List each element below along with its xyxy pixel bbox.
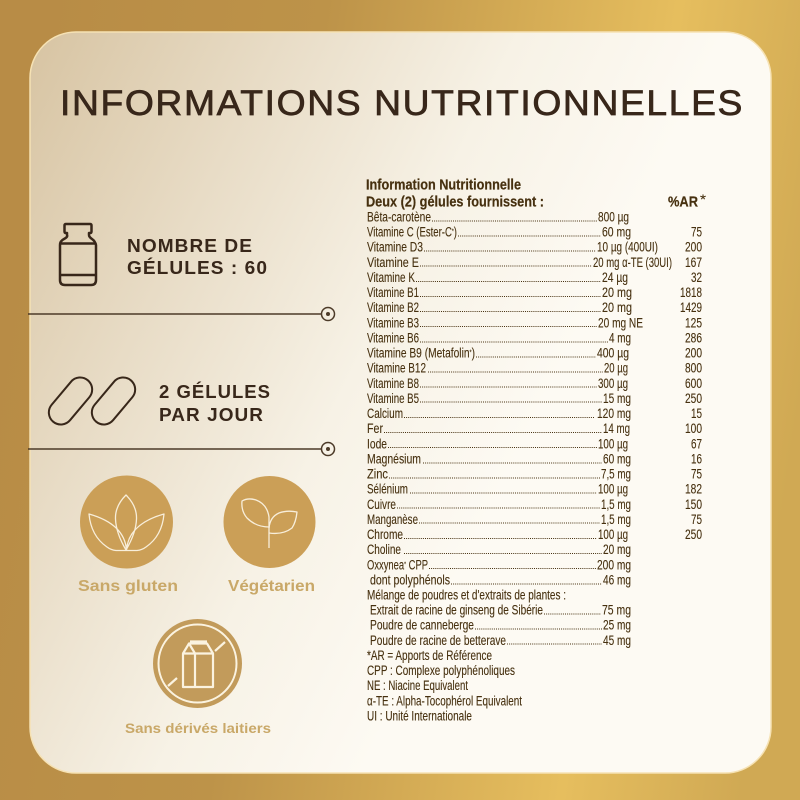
row: oxxynea: 200 mg [597,557,631,572]
row: vitamine E: Vitamine E [367,255,419,270]
row: vitamine C: 75 [691,225,702,240]
text: nombre de gélules: NOMBRE DE [127,236,253,256]
icon: crossed-out milk carton [153,619,242,708]
row: magnésium [367,451,702,466]
icon: gluten-free leaves [80,476,173,568]
row: oxxynea: * [404,561,406,568]
badge: sans gluten [78,476,178,595]
row: vitamine B2: 20 mg [602,300,632,315]
row: oxxynea: Oxxynea [367,557,420,572]
row: vitamine C: Vitamine C (Ester-C [367,225,487,240]
badge: végétarien [224,476,316,595]
row: betterave [370,633,631,648]
label: Végétarien [228,578,315,595]
row: vitamine B1: Vitamine B1 [367,285,419,300]
row: zinc [367,466,702,482]
row: vitamine B6: Vitamine B6 [367,330,419,346]
row: vitamine B9: * [470,350,472,357]
row: vitamine B9: Vitamine B9 (Metafolin [367,346,503,361]
row: fer [367,421,702,436]
row: vitamine C: * [452,229,454,236]
row: canneberge: 25 mg [603,618,631,633]
row: sélénium: 182 [685,482,702,497]
table heading [366,176,707,210]
row: dont polyphénols: 46 mg [603,572,631,587]
row: ginseng: Extrait de racine de ginseng de Sibérie [370,603,543,618]
row: vitamine B6 [367,330,702,346]
row: choline: Choline [367,542,401,557]
row: cuivre: Cuivre [367,497,396,512]
row: vitamine B2: Vitamine B2 [367,300,419,315]
row: chrome: 100 µg [598,527,628,542]
row: vitamine B1: 20 mg [602,285,632,300]
row: vitamine B8: 300 µg [598,376,628,391]
row: iode [367,436,702,451]
icon: sprout [224,476,316,568]
row: cuivre: 150 [685,497,702,512]
row: vitamine B3: 125 [685,315,702,330]
row: magnésium: Magnésium [367,451,421,466]
row: vitamine K: 24 µg [602,270,628,285]
row: vitamine E: 167 [685,255,702,270]
row: vitamine C: ) [454,225,457,240]
row: vitamine B2: 1429 [680,300,702,315]
panel: capsule count [60,224,268,285]
row: vitamine D3: 200 [685,240,702,255]
row: vitamine K: 32 [691,270,702,285]
row: calcium: 120 mg [597,406,631,421]
row: iode: 100 µg [598,436,628,451]
row: vitamine B6: 4 mg [609,330,631,346]
row: fer: 14 mg [603,421,630,436]
row: calcium: 15 [691,406,702,421]
footnotes: NE : Niacine Equivalent [367,678,468,693]
row: oxxynea [367,557,631,572]
row: vitamine B8: 600 [685,376,702,391]
row: vitamine B9: ) [472,346,475,361]
table heading: * [700,192,707,207]
row: iode: 67 [691,436,702,451]
row: mélange heading: Mélange de poudres et d'extraits de plantes : [367,588,566,602]
row: vitamine B5: 15 mg [603,391,631,406]
text: deux gélules par jour: PAR JOUR [159,405,264,425]
label: Sans gluten [78,578,178,595]
row: vitamine B3 [367,315,702,330]
row: zinc: Zinc [367,466,388,482]
row: ginseng: 75 mg [602,603,631,618]
row: calcium: Calcium [367,406,403,421]
label: Sans dérivés laitiers [125,720,271,736]
row: manganèse [367,512,702,527]
row: sélénium: Sélénium [367,482,408,497]
row: dont polyphénols: dont polyphénols [370,572,450,587]
row: vitamine B5 [367,391,702,406]
row: vitamine B1 [367,285,702,300]
row: vitamine C: 60 mg [602,225,631,240]
row: vitamine B8: Vitamine B8 [367,376,419,391]
row: sélénium [367,482,702,497]
row: magnésium: 16 [691,451,702,466]
row: manganèse: 75 [691,512,702,527]
row: oxxynea: CPP [406,557,428,572]
nutrition table [366,176,707,724]
row: cuivre [367,497,702,512]
row: vitamine B9: 400 µg [597,346,629,361]
row: vitamine B12: Vitamine B12 [367,361,426,376]
badge: sans dérivés laitiers [125,619,271,736]
row: vitamine B3: Vitamine B3 [367,315,419,330]
row: choline: 20 mg [603,542,631,557]
row: vitamine B9: 200 [685,346,702,361]
icon: two capsules [44,373,140,429]
row: vitamine B2 [367,300,702,315]
divider with end marker [28,308,334,320]
footnotes: UI : Unité Internationale [367,708,472,724]
text: nombre de gélules: GÉLULES : 60 [127,257,268,278]
text: deux gélules par jour: 2 GÉLULES [159,381,271,402]
row: chrome [367,527,702,542]
row: canneberge: Poudre de canneberge [370,618,474,633]
row: canneberge [370,618,631,633]
panel: daily dose [44,373,271,429]
row: fer: Fer [367,421,383,436]
row: bêta-carotène [367,210,629,224]
row: vitamine D3: 10 µg (400UI) [597,240,658,255]
footnotes [367,648,522,724]
row: vitamine D3 [367,240,702,255]
row: zinc: 75 [691,466,702,482]
row: vitamine D3: Vitamine D3 [367,240,423,255]
row: vitamine K: Vitamine K [367,270,415,285]
row: sélénium: 100 µg [598,482,628,497]
footnotes: CPP : Complexe polyphénoliques [367,663,515,678]
row: vitamine E [367,255,702,270]
row: dont polyphénols [370,572,631,587]
row: iode: Iode [367,436,387,451]
row: bêta-carotène: Bêta-carotène [367,210,431,224]
row: vitamine K [367,270,702,285]
row: vitamine C [367,225,702,240]
row: calcium [367,406,702,421]
row: betterave: Poudre de racine de betterave [370,633,506,648]
row: chrome: Chrome [367,527,403,542]
row: manganèse: Manganèse [367,512,418,527]
row: cuivre: 1,5 mg [601,497,631,512]
row: bêta-carotène: 800 µg [598,210,629,224]
row: vitamine B12 [367,361,702,376]
row: vitamine B12: 20 µg [604,361,628,376]
row: magnésium: 60 mg [603,451,631,466]
table heading: Deux (2) gélules fournissent : [366,194,544,210]
row: choline [367,542,631,557]
divider with end marker [28,442,334,456]
footnotes: *AR = Apports de Référence [367,648,492,663]
row: zinc: 7,5 mg [601,466,631,482]
row: manganèse: 1,5 mg [601,512,631,527]
row: chrome: 250 [685,527,702,542]
title: INFORMATIONS NUTRITIONNELLES [60,84,744,123]
row: vitamine E: 20 mg α-TE (30UI) [593,255,672,270]
row: vitamine B12: 800 [685,361,702,376]
footnotes: α-TE : Alpha-Tocophérol Equivalent [367,693,522,708]
row: vitamine B8 [367,376,702,391]
row: fer: 100 [685,421,702,436]
row: vitamine B5: Vitamine B5 [367,391,419,406]
icon: bottle [60,224,96,285]
row: vitamine B5: 250 [685,391,702,406]
row: vitamine B9 [367,346,702,361]
table heading: Information Nutritionnelle [366,176,521,194]
row: vitamine B6: 286 [685,330,702,346]
row: vitamine B1: 1818 [680,285,702,300]
row: betterave: 45 mg [603,633,631,648]
table heading: %AR [668,194,698,210]
row: vitamine B3: 20 mg NE [598,315,643,330]
